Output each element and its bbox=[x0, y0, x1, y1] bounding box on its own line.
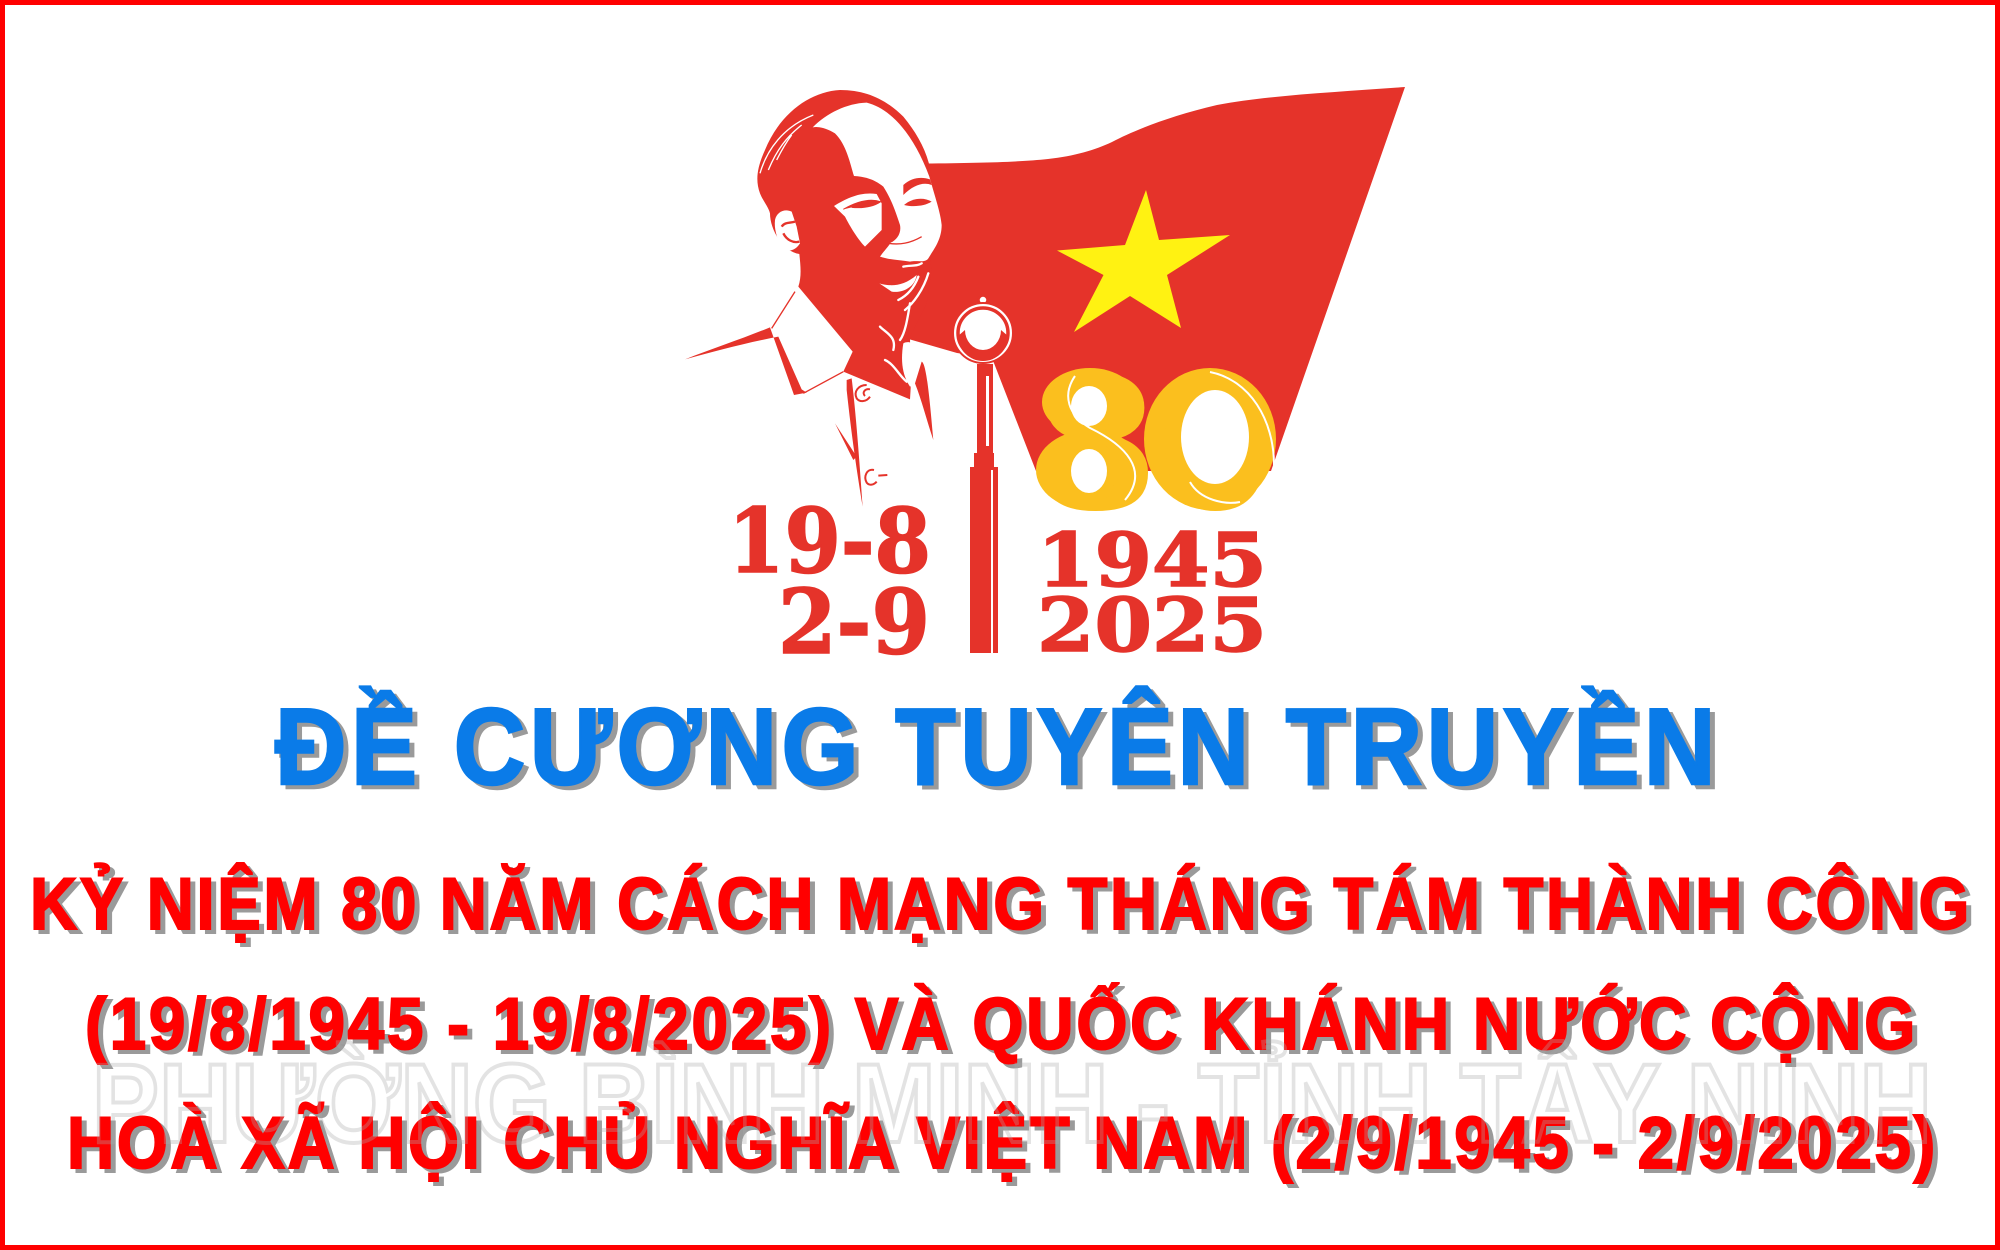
right eye and brow lines bbox=[903, 178, 932, 195]
shoulder wedge and collar line bbox=[685, 327, 807, 395]
title: ĐỀ CƯƠNG TUYÊN TRUYỀN bbox=[275, 686, 1720, 808]
star bbox=[1057, 190, 1230, 332]
logo: 80th anniversary emblem bbox=[685, 87, 1405, 674]
shirt highlight by beard bbox=[902, 342, 924, 387]
left eye patch bbox=[834, 194, 882, 247]
date text: 2-9 bbox=[778, 569, 930, 674]
number 80: 80 bbox=[1036, 327, 1276, 554]
date text: 19-8 bbox=[728, 488, 931, 593]
microphone bbox=[953, 296, 1013, 653]
date text: 2025 bbox=[1037, 583, 1267, 669]
date text: 1945 bbox=[1037, 518, 1267, 604]
head and chest silhouette bbox=[757, 90, 942, 399]
flag bbox=[905, 87, 1405, 471]
face highlight bbox=[813, 103, 942, 262]
ear bbox=[775, 210, 800, 250]
portrait bbox=[685, 90, 942, 507]
mouth and beard strands bbox=[879, 275, 917, 292]
date text bbox=[728, 488, 1267, 674]
hair strands bbox=[760, 115, 813, 173]
shirt lines and buttons bbox=[915, 362, 933, 440]
